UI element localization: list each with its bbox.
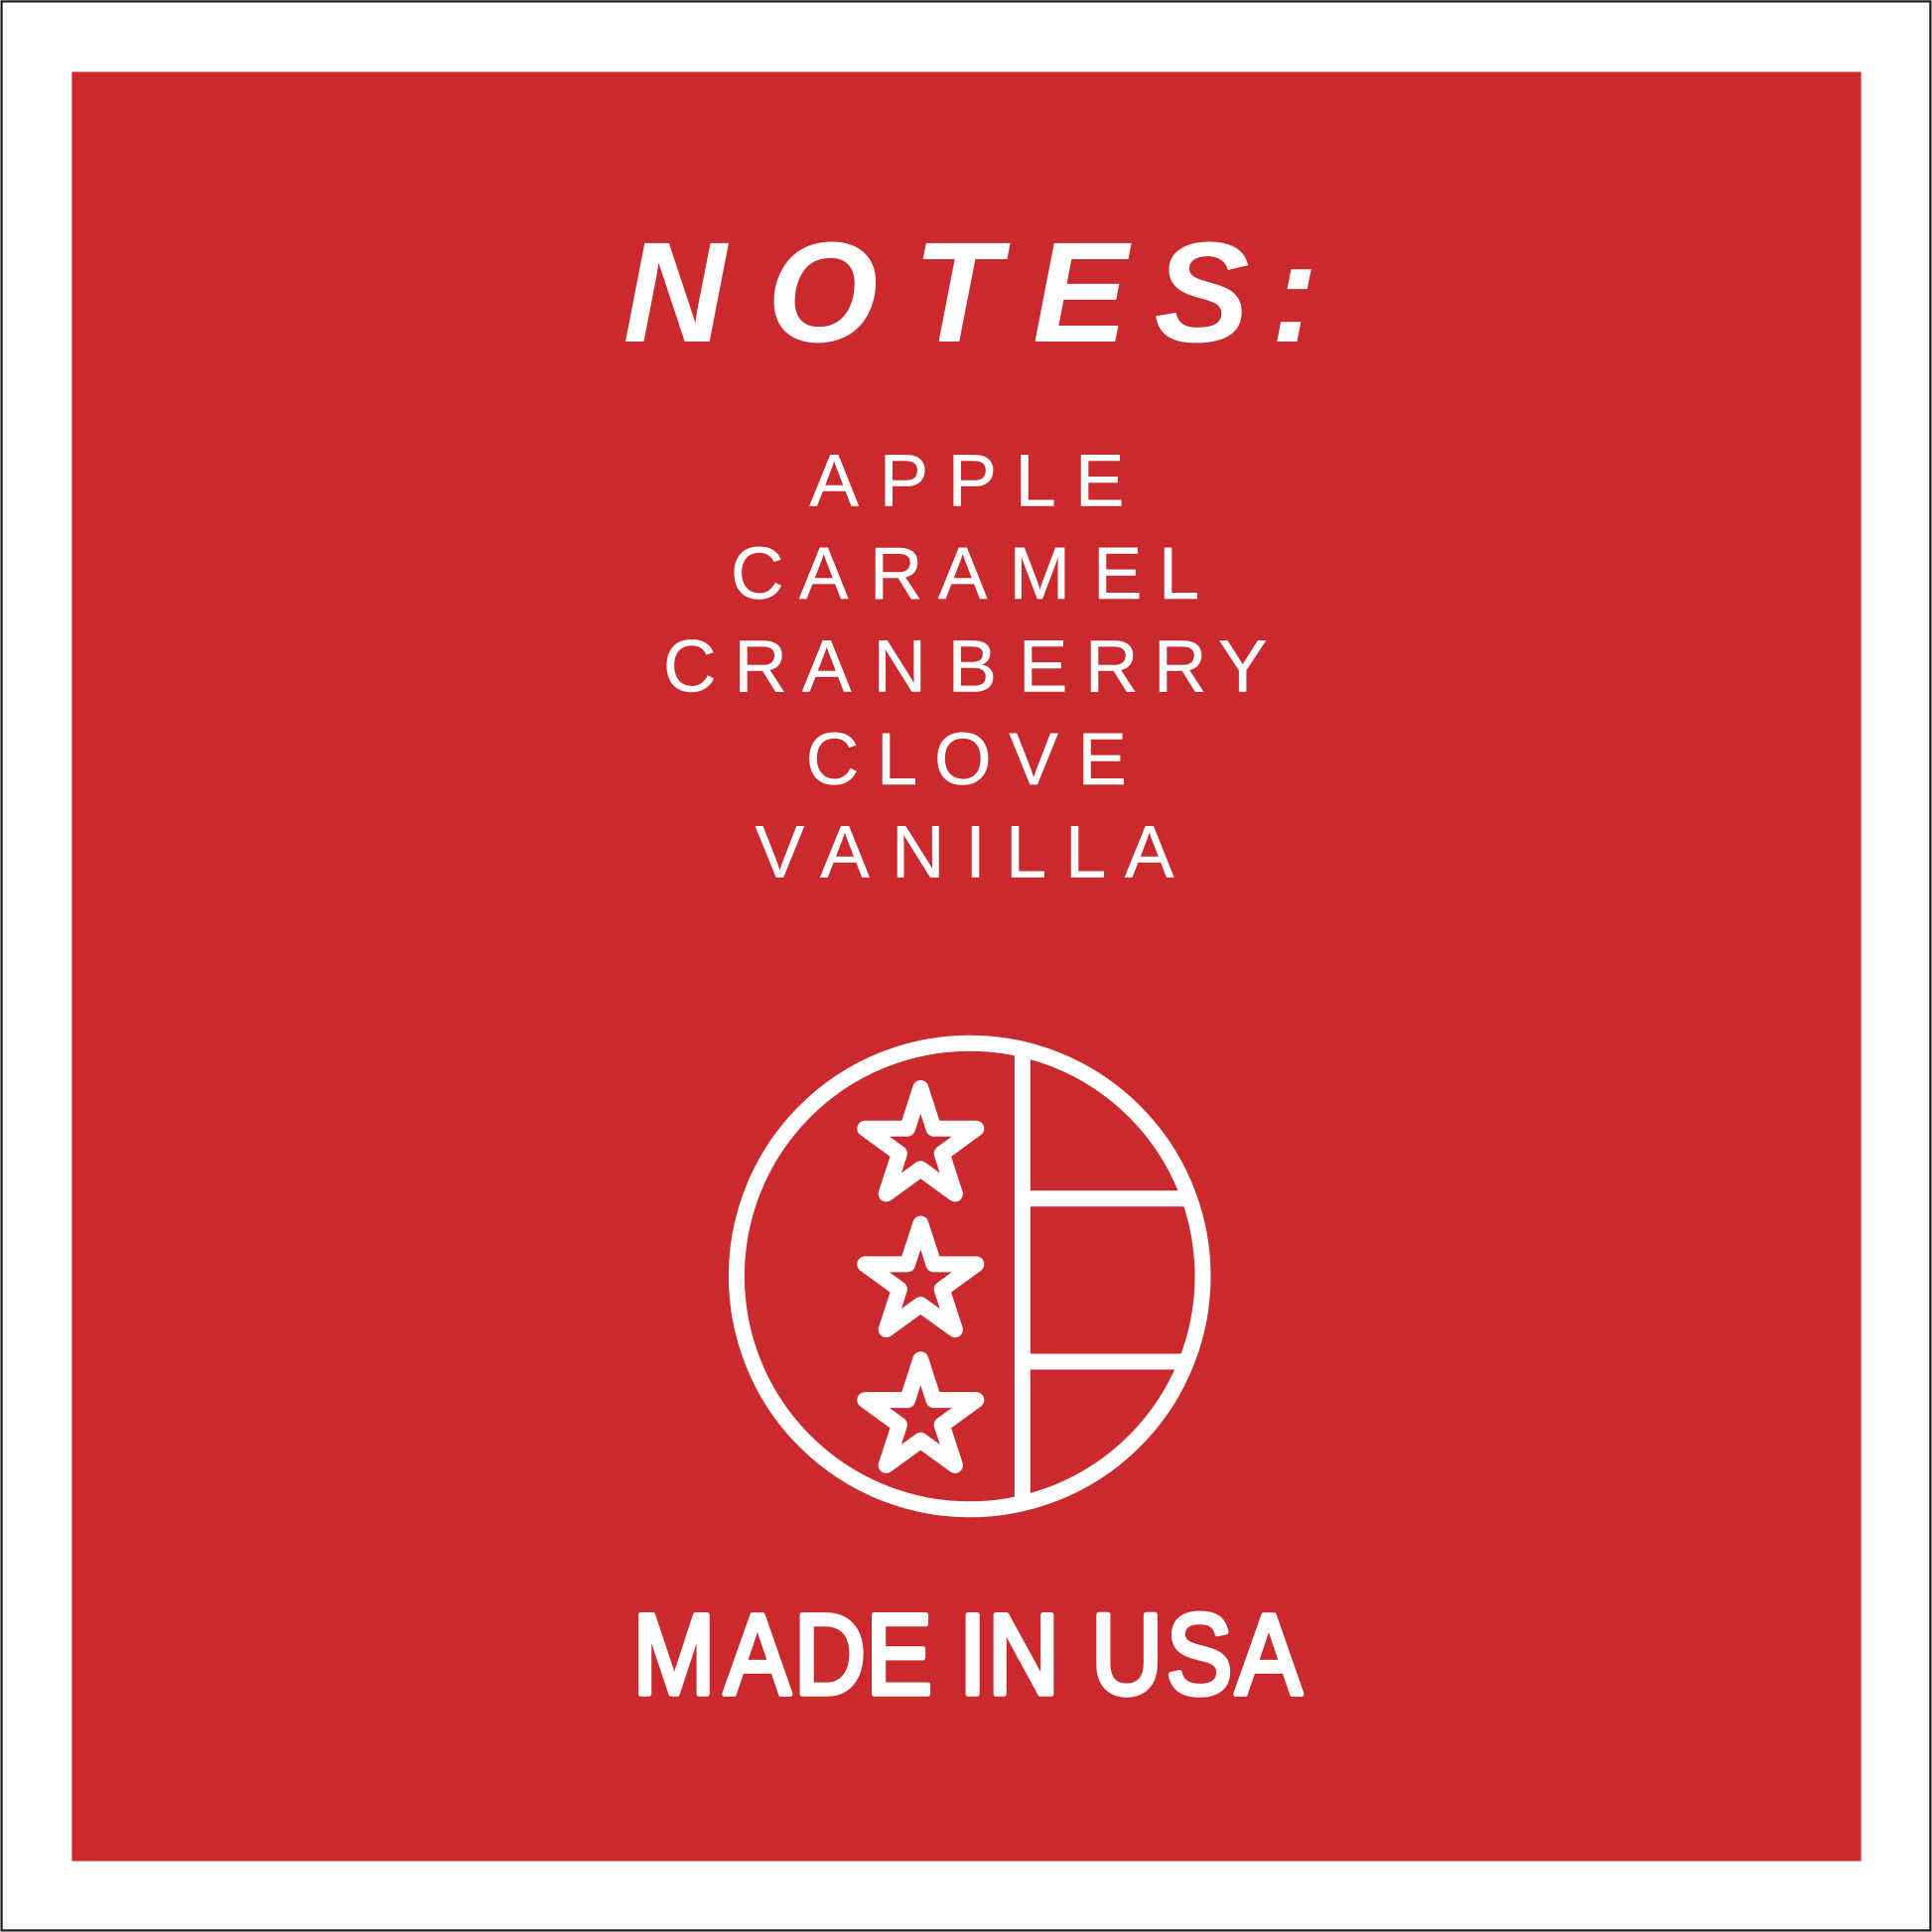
icon: three stars <box>865 1088 976 1465</box>
icon: circular flag with three stars <box>737 1043 1203 1509</box>
icon: star bottom <box>865 1359 976 1465</box>
note: vanilla: VANILLA <box>756 810 1174 893</box>
note: caramel: CARAMEL <box>731 532 1199 615</box>
note: clove: CLOVE <box>806 718 1127 800</box>
icon: flag circle outline <box>737 1043 1203 1509</box>
icon: flag stripes <box>1023 1048 1189 1503</box>
icon: star middle <box>865 1224 976 1329</box>
note: apple: APPLE <box>810 440 1124 522</box>
text block: flavour notes list <box>663 440 1267 893</box>
text: made in usa: MADE IN USA <box>632 1589 1302 1719</box>
heading: notes: NOTES: <box>623 212 1318 372</box>
note: cranberry: CRANBERRY <box>663 625 1267 708</box>
icon: star top <box>865 1088 976 1193</box>
